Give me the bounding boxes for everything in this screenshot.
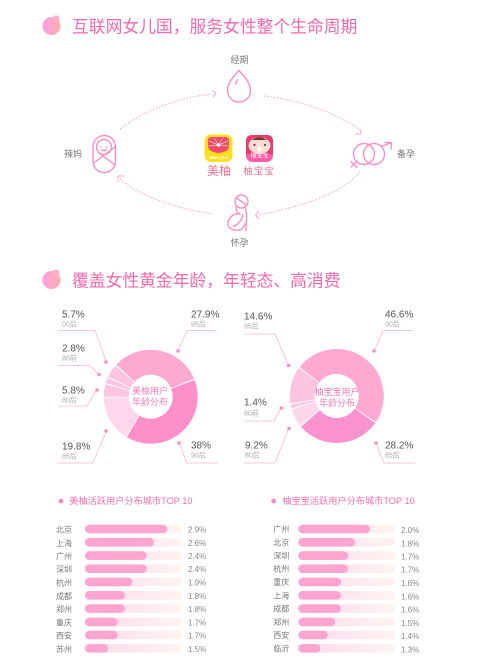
callout: 80前 2.8%: 2.8%: [62, 344, 85, 354]
bar chart: meetyou cities: 1.8%: [188, 592, 206, 601]
callout: 80前 1.4%: 80前: [244, 408, 259, 418]
label: period: 经期: [230, 54, 249, 65]
callout: 80前 2.8%: [58, 344, 101, 376]
chart heading: meetyou cities: 美柚活跃用户分布城市TOP 10: [69, 495, 193, 506]
bar chart: youbaobao cities: 1.4%: [401, 632, 419, 641]
bar chart: youbaobao cities: 1.5%: [401, 619, 419, 628]
icon: youbaobao app: [246, 135, 273, 162]
bar chart: meetyou cities: 1.5%: [188, 645, 206, 654]
heading text two: 覆盖女性黄金年龄，年轻态、高消费: [72, 272, 341, 290]
label: pregnancy: 怀孕: [230, 237, 249, 248]
callout: 90后 46.6%: 90后: [385, 320, 400, 328]
panel: youbaobao city ranking: [271, 495, 419, 654]
panel: meetyou age donut: [58, 310, 219, 463]
bar chart: youbaobao cities: 1.6%: [401, 592, 419, 601]
callout: 80后 9.2%: 9.2%: [245, 440, 268, 452]
bar chart: meetyou cities: 2.4%: [188, 565, 206, 574]
bar chart: meetyou cities: 2.9%: [188, 526, 206, 534]
callout: 85后 28.2%: 85后: [385, 450, 400, 460]
heading: section one: [42, 15, 357, 36]
donut chart: meetyou: [102, 348, 199, 445]
callout: 85后 19.8%: 85后: [62, 452, 77, 460]
callout: 85后 19.8%: 19.8%: [62, 442, 90, 452]
callout: 00后 5.7%: 00后: [62, 320, 77, 328]
bar chart: youbaobao cities: 杭州: [273, 564, 289, 574]
callout: 90后 38%: [177, 440, 218, 463]
bar chart: meetyou cities: 广州: [56, 551, 72, 561]
callout: 95后 27.9%: [176, 310, 219, 353]
callout: 80后 9.2%: [244, 427, 291, 463]
callout: 80后 5.8%: 5.8%: [62, 386, 85, 396]
label: youbaobao: 柚宝宝: [243, 166, 275, 178]
callout: 80前 2.8%: 80前: [62, 354, 77, 362]
bar chart: meetyou cities: 深圳: [56, 564, 72, 574]
bar chart: youbaobao cities: 广州: [273, 524, 289, 534]
bar chart: youbaobao cities: 西安: [273, 630, 289, 640]
bar chart: youbaobao cities: 上海: [273, 590, 289, 600]
icon: youbaobao app: 柚宝宝: [250, 152, 269, 160]
bar chart: youbaobao cities: 临沂: [273, 643, 289, 653]
donut centre label: youbaobao: 柚宝宝用户: [314, 386, 360, 397]
callout: 95后 27.9%: 27.9%: [191, 310, 219, 320]
icon: meetyou app: Meet you: [209, 155, 228, 160]
callout: 90后 38%: 38%: [191, 440, 211, 452]
bar chart: youbaobao cities: 北京: [273, 537, 289, 547]
callout: 90后 46.6%: 46.6%: [385, 310, 413, 320]
bar chart: youbaobao cities: 成都: [273, 604, 289, 614]
heading: section two: [42, 269, 341, 290]
bar chart: youbaobao cities: 重庆: [273, 577, 289, 587]
callout: 80后 5.8%: [58, 386, 99, 406]
bar chart: youbaobao cities: 1.7%: [401, 553, 419, 562]
donut centre label: youbaobao: 年龄分布: [319, 397, 355, 408]
donut centre label: meetyou: [132, 385, 168, 407]
bar chart: meetyou cities: 1.8%: [188, 605, 206, 614]
bar chart: youbaobao cities: 1.6%: [401, 606, 419, 615]
bar chart: meetyou cities: 上海: [56, 538, 72, 548]
icon: meetyou app: [204, 134, 232, 162]
callout: 00后 5.7%: 5.7%: [62, 310, 85, 320]
bar chart: meetyou cities: 杭州: [56, 578, 72, 588]
bar chart: meetyou cities: 1.7%: [188, 632, 206, 640]
bar chart: meetyou cities: 西安: [56, 630, 72, 640]
bar chart: meetyou cities: 2.6%: [188, 539, 206, 548]
bar chart: youbaobao cities: 2.0%: [401, 526, 419, 535]
icon: swaddled baby: [93, 136, 116, 172]
icon: heading bubble two: [42, 269, 60, 289]
chart heading: youbaobao cities: 柚宝宝活跃用户分布城市TOP 10: [282, 495, 415, 506]
bar chart: youbaobao cities: 深圳: [273, 551, 289, 561]
label: preparing: 备孕: [397, 148, 415, 159]
label: raising: 辣妈: [64, 148, 82, 159]
label: meetyou: 美柚: [207, 163, 231, 178]
bar chart: meetyou cities: 成都: [56, 591, 72, 601]
icon: heading bubble one: [42, 15, 60, 35]
panel: youbaobao age donut: [244, 310, 415, 463]
callout: 95后 27.9%: 95后: [191, 320, 206, 328]
donut chart: youbaobao: [288, 347, 385, 445]
arrow: preparing to pregnancy: [256, 172, 360, 219]
callout: 90后 46.6%: [372, 310, 413, 353]
icon: pregnant woman: [228, 195, 248, 231]
callout: 80后 9.2%: 80后: [245, 450, 260, 460]
callout: 85后 19.8%: [58, 429, 108, 463]
bar chart: youbaobao cities: 1.6%: [401, 579, 419, 588]
arrow: period to preparing: [264, 96, 361, 134]
donut centre label: meetyou: 美柚用户: [132, 385, 168, 396]
bar chart: youbaobao cities: 1.3%: [401, 645, 419, 654]
panel: life cycle diagram: [64, 54, 415, 248]
callout: 85后 28.2%: [374, 440, 415, 463]
arrow: pregnancy to raising: [118, 176, 213, 214]
bar chart: youbaobao cities: 1.7%: [401, 566, 419, 575]
bar chart: meetyou cities: 1.9%: [188, 578, 206, 588]
bar chart: meetyou cities: 2.4%: [188, 552, 206, 561]
callout: 95后 14.6%: 14.6%: [244, 312, 272, 322]
arrow: raising to period: [120, 90, 216, 129]
callout: 00后 5.7%: [58, 310, 108, 364]
icon: water drop: [228, 70, 250, 102]
bar chart: meetyou cities: 北京: [56, 524, 72, 534]
bar chart: meetyou cities: [56, 524, 206, 654]
panel: meetyou city ranking: [56, 495, 206, 654]
callout: 80后 5.8%: 80后: [62, 396, 77, 404]
heading text one: 互联网女儿国，服务女性整个生命周期: [72, 18, 357, 36]
callout: 95后 14.6%: 95后: [244, 322, 259, 330]
callout: 80前 1.4%: [244, 398, 283, 421]
donut centre label: youbaobao: [314, 386, 360, 408]
bar chart: meetyou cities: 郑州: [56, 604, 72, 614]
bar chart: youbaobao cities: 郑州: [273, 617, 289, 627]
bar chart: youbaobao cities: 1.8%: [401, 539, 419, 548]
bar chart: meetyou cities: 重庆: [56, 618, 72, 628]
callout: 95后 14.6%: [244, 312, 290, 367]
bar chart: meetyou cities: 1.7%: [188, 618, 206, 628]
callout: 85后 28.2%: 28.2%: [385, 440, 413, 452]
icon: male and female symbols: [351, 142, 392, 168]
donut centre label: meetyou: 年龄分布: [132, 396, 168, 407]
callout: 80前 1.4%: 1.4%: [244, 398, 267, 408]
bar chart: meetyou cities: 苏州: [56, 644, 72, 654]
bar chart: youbaobao cities: [273, 524, 419, 654]
callout: 90后 38%: 90后: [191, 450, 206, 460]
